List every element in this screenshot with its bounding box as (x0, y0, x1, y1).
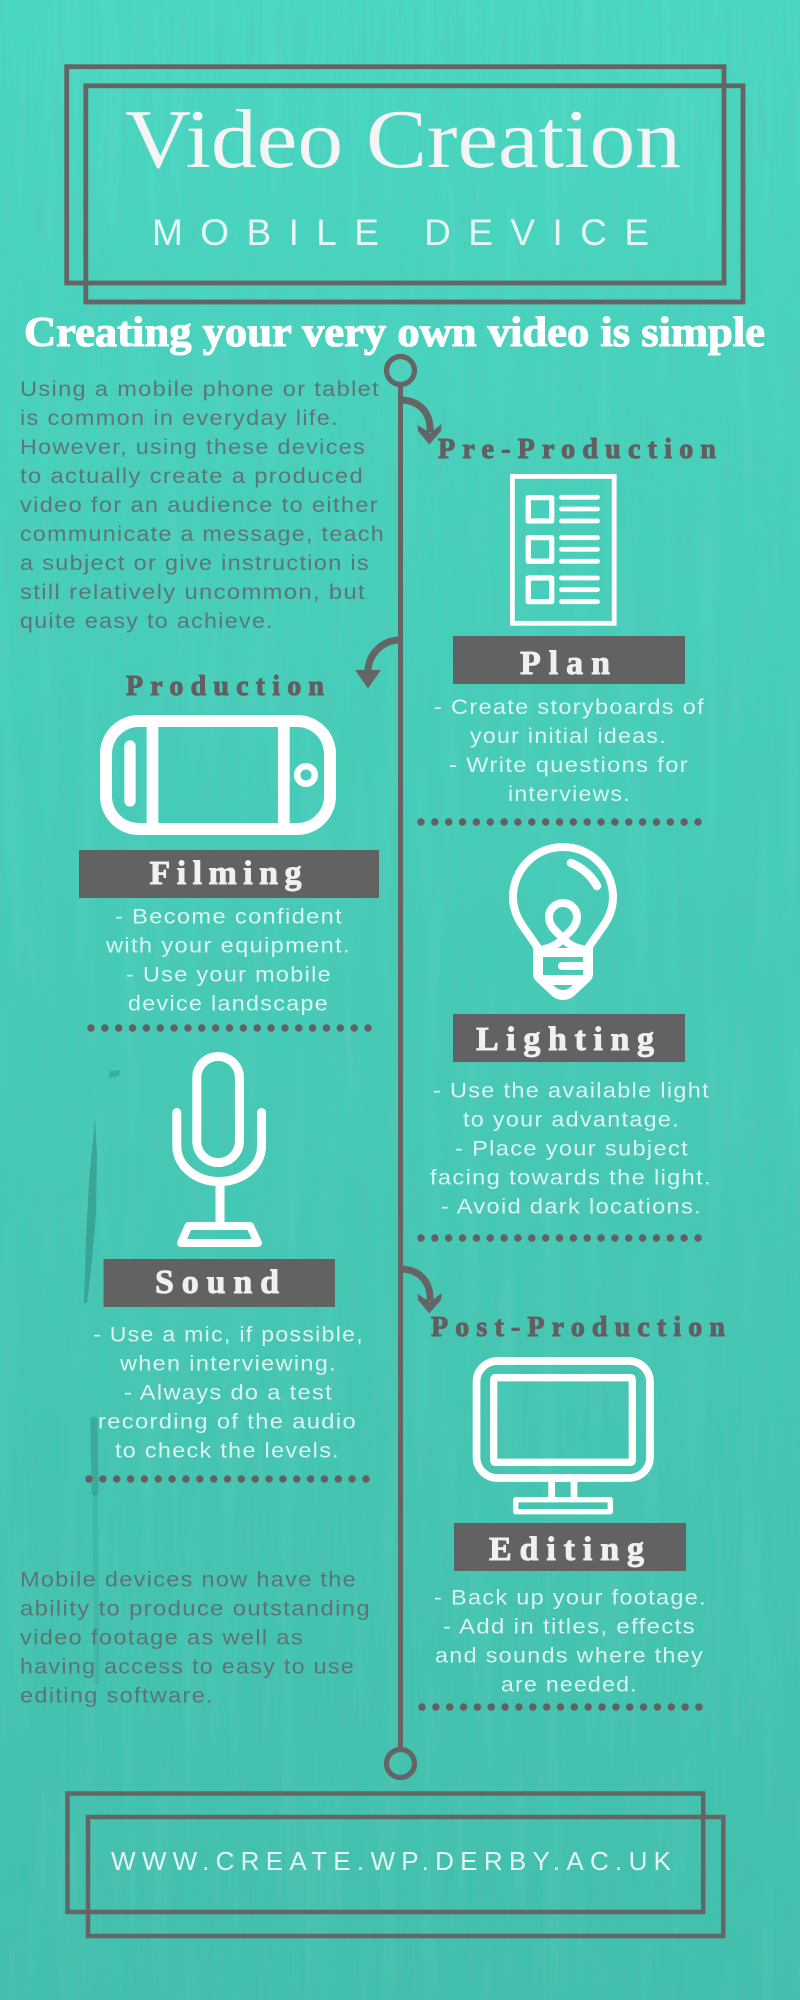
intro text: However, using these devices (20, 436, 366, 459)
filming text: with your equipment. (105, 934, 351, 958)
sound text: when interviewing. (119, 1352, 337, 1376)
filming text: - Use your mobile (126, 964, 332, 986)
subtitle: MOBILE DEVICE (152, 212, 649, 253)
section: post-production editing (431, 1312, 725, 1696)
editing text: are needed. (501, 1674, 638, 1696)
phase label: pre-production: Pre-Production (438, 434, 716, 465)
plan text: your initial ideas. (470, 725, 667, 748)
plan text (434, 696, 705, 806)
phase label: production: Production (126, 671, 324, 702)
arrow: to pre-production (402, 400, 442, 444)
editing text: - Back up your footage. (434, 1586, 707, 1610)
intro text: communicate a message, teach (20, 523, 385, 546)
bar: editing: Editing (489, 1531, 644, 1568)
lighting text: - Avoid dark locations. (441, 1196, 702, 1218)
icon: monitor (476, 1361, 650, 1512)
editing text (434, 1586, 707, 1696)
title frames (67, 67, 743, 302)
arrow: to post-production (402, 1269, 442, 1314)
filming text (105, 906, 351, 1016)
title panel (67, 67, 743, 302)
intro text: is common in everyday life. (20, 407, 339, 430)
intro text (20, 378, 385, 633)
lighting text: facing towards the light. (430, 1166, 712, 1190)
section: pre-production plan (434, 434, 716, 806)
editing text: - Add in titles, effects (443, 1616, 696, 1638)
plan text: interviews. (508, 783, 631, 806)
icon: light bulb (513, 847, 613, 1000)
bar: filming (79, 850, 379, 898)
bar: plan (453, 636, 685, 684)
sound text (93, 1324, 364, 1462)
closing text: video footage as well as (20, 1626, 304, 1650)
sound text: - Use a mic, if possible, (93, 1324, 364, 1346)
lighting text: - Use the available light (433, 1080, 710, 1102)
bar: lighting: Lighting (476, 1021, 654, 1058)
lighting text (430, 1080, 712, 1218)
sound text: recording of the audio (98, 1410, 357, 1434)
bar: plan: Plan (520, 645, 610, 682)
heading: Creating your very own video is simple (24, 310, 765, 356)
closing text: Mobile devices now have the (20, 1568, 357, 1592)
footer panel (68, 1794, 723, 1936)
intro text: a subject or give instruction is (20, 552, 370, 575)
section: production filming (79, 671, 379, 1016)
sound text: - Always do a test (124, 1382, 333, 1404)
closing text: ability to produce outstanding (20, 1598, 371, 1620)
bar: lighting (453, 1014, 685, 1062)
editing text: and sounds where they (435, 1644, 704, 1668)
footer frames (68, 1794, 723, 1936)
phase label: post-production: Post-Production (431, 1312, 725, 1343)
closing text: having access to easy to use (20, 1656, 355, 1678)
intro text: still relatively uncommon, but (20, 581, 366, 604)
bar: editing (454, 1523, 686, 1571)
intro text: Using a mobile phone or tablet (20, 378, 380, 401)
plan text: - Create storyboards of (434, 696, 705, 719)
bar: filming: Filming (150, 855, 302, 892)
plan text: - Write questions for (449, 754, 689, 777)
bar: sound (104, 1259, 335, 1307)
timeline (386, 356, 414, 1778)
closing text (20, 1568, 371, 1708)
lighting text: - Place your subject (455, 1138, 689, 1160)
filming text: - Become confident (115, 906, 343, 928)
filming text: device landscape (128, 992, 329, 1016)
intro text: video for an audience to either (20, 494, 379, 517)
arrow: to production (355, 640, 400, 688)
section: lighting (430, 847, 712, 1218)
icon: checklist (512, 476, 614, 623)
title: Video Creation (125, 93, 681, 186)
intro text: to actually create a produced (20, 465, 364, 488)
icon: microphone (177, 1056, 262, 1243)
section: sound (93, 1056, 364, 1462)
sound text: to check the levels. (115, 1440, 340, 1462)
intro text: quite easy to achieve. (20, 610, 274, 633)
lighting text: to your advantage. (463, 1108, 680, 1132)
bar: sound: Sound (155, 1264, 279, 1301)
footer url: WWW.CREATE.WP.DERBY.AC.UK (111, 1846, 672, 1876)
closing text: editing software. (20, 1684, 214, 1708)
icon: smartphone (106, 721, 330, 829)
